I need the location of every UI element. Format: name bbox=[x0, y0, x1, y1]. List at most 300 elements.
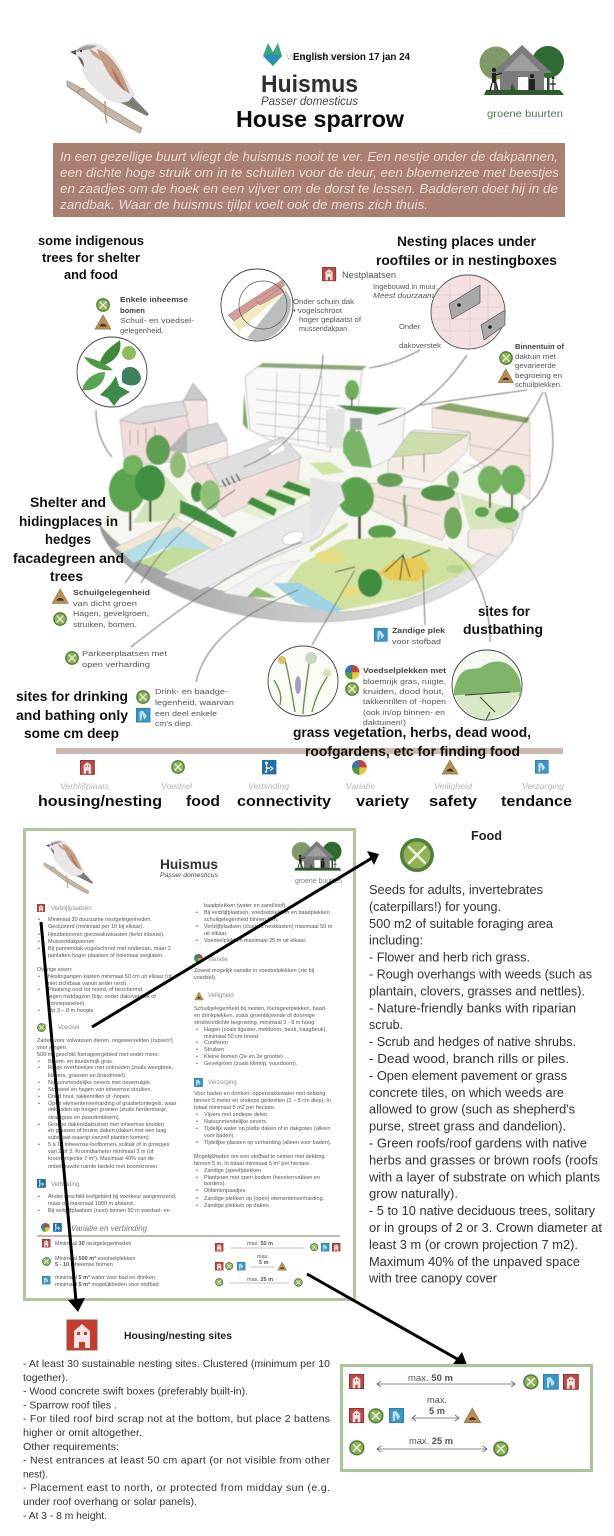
label: under sloped roof: hoger geplaatst of bbox=[299, 315, 362, 324]
section: Verzorging: borders). bbox=[204, 1181, 226, 1187]
label: under sloped roof bbox=[293, 297, 362, 333]
fact sheet bird bbox=[44, 840, 93, 894]
legend: Dutch labels: Veiligheid bbox=[434, 782, 473, 791]
callout: food places: daktuinen!) bbox=[363, 718, 407, 727]
text block: housing requirements: - Placement east to north, or protected from midday sun (e.g. bbox=[23, 1482, 330, 1494]
arrow: to food section bbox=[92, 851, 379, 1027]
section: Verbinding: maar op maximaal 1000 m afstand. bbox=[48, 1201, 135, 1207]
section: Veiligheid: Gevelgroen (zoals klimop, vuurdoorn). bbox=[204, 1061, 298, 1067]
callout: courtyard and roof garden bbox=[498, 342, 564, 389]
callout: dense green shelter bbox=[52, 588, 150, 629]
text block: housing requirements: - At least 30 sustainable nesting sites. Clustered (minimum per 10 bbox=[23, 1358, 330, 1370]
section: connection continued: Voedselplekken maximaal 25 m uit elkaar. bbox=[204, 938, 307, 944]
mini distance diagram: max. 50 m bbox=[247, 1241, 273, 1247]
text block: food requirements: - Flower and herb rich grass. bbox=[369, 950, 530, 965]
section: Verzorging: Tijdelijk water op platte daken of in dakgoten (alleen bbox=[204, 1126, 330, 1132]
section: connection continued: Verblijfplaatsen (clusters nestkasten) maximaal 50 m bbox=[204, 924, 333, 930]
section: Voedsel: Struweel en hagen van inheemse struiken. bbox=[48, 1087, 152, 1093]
section: Veiligheid: Kleine bomen (2e en 3e grootte) bbox=[204, 1054, 283, 1060]
legend: English labels: variety bbox=[356, 793, 410, 810]
callout: food places bbox=[345, 665, 447, 727]
mini distance diagram bbox=[215, 1241, 340, 1287]
section: Verblijfplaatsen: Op 3 – 8 m hoogte. bbox=[48, 1008, 96, 1014]
section: Variatie: Zoveel mogelijk variatie in voedselplekken (zie bij bbox=[194, 968, 314, 974]
callout: nesting places heading: Nesting places under bbox=[397, 233, 537, 249]
intro panel: zandbak. Waar de huismus tjilpt voelt ook de mens zich thuis. bbox=[59, 197, 428, 212]
section: Verblijfplaatsen: • bbox=[38, 1008, 40, 1014]
section: connection continued bbox=[196, 903, 333, 944]
section: Verblijfplaatsen: Houtbetonnen gierzwaluwkasten (liefst inbouw). bbox=[48, 932, 165, 938]
trees bbox=[109, 435, 525, 542]
section: Verblijfplaatsen: • bbox=[38, 987, 40, 993]
label: under eaves bbox=[399, 322, 441, 350]
fact sheet title bbox=[160, 856, 219, 879]
callout: drink and bath place: cm's diep. bbox=[155, 719, 193, 728]
callout: drink and bath place bbox=[136, 687, 234, 728]
text block: housing requirements: together). bbox=[23, 1372, 68, 1384]
legend: English labels bbox=[38, 793, 572, 810]
callout: food places: kruiden, dood hout, bbox=[363, 687, 444, 696]
callout: courtyard and roof garden: gevarieerde bbox=[515, 361, 556, 370]
text block: food requirements: - Scrub and hedges of native shrubs. bbox=[369, 1034, 576, 1049]
callout: courtyard and roof garden: daktuin met bbox=[515, 352, 557, 361]
icon: housing bbox=[67, 1320, 97, 1350]
callout: shelter heading bbox=[13, 494, 124, 584]
right stepped building bbox=[370, 403, 530, 540]
section: connection continued: • bbox=[196, 924, 198, 930]
callout: indigenous trees heading: trees for shelter bbox=[42, 250, 140, 265]
legend: English labels: housing/nesting bbox=[38, 793, 162, 810]
callout: drink and bath place: legenheid, waarvan bbox=[155, 698, 234, 707]
intro panel: en zaadjes om de hoek en een vijver om de dorst te lessen. Badderen doet hij in de bbox=[60, 181, 558, 196]
mini distance diagram: 5 m bbox=[259, 1260, 269, 1266]
mini distance diagram: max. bbox=[257, 1254, 269, 1260]
callout: sandy place: Zandige plek bbox=[392, 626, 446, 635]
detail circle: flowers bbox=[268, 646, 338, 716]
section: Verzorging: Zandige plekken op (open) elementenverharding. bbox=[204, 1196, 325, 1202]
section: Voedsel: Bloem- en kruidenrijk gras. bbox=[48, 1059, 114, 1065]
panel: distance diagram bbox=[342, 1366, 592, 1470]
label: under sloped roof: mussendakpan. bbox=[299, 324, 349, 333]
section: Verzorging: • bbox=[196, 1196, 198, 1202]
text block: food requirements: - 5 to 10 native deciduous trees, solitary bbox=[369, 1203, 595, 1218]
section: Veiligheid: Struiken bbox=[204, 1047, 224, 1053]
title: Huismus: Huismus bbox=[261, 71, 358, 98]
section: Veiligheid: minimaal 50 cm breed bbox=[204, 1034, 258, 1040]
section: Voedsel: Voedsel bbox=[58, 1025, 79, 1031]
section: Voedsel: 5 à 10 inheemse loofbomen, solitair of in groepjes bbox=[48, 1142, 170, 1148]
row: 5 m: max. bbox=[427, 1395, 447, 1406]
meadow colours and sand patch bbox=[315, 550, 464, 598]
callout: grass vegetation heading: grass vegetation, herbs, dead wood, bbox=[293, 724, 531, 740]
callout: drinking and bathing heading: sites for drinking bbox=[16, 688, 128, 704]
text block: housing requirements: Other requirements: bbox=[23, 1441, 119, 1453]
row: 50 m bbox=[349, 1373, 579, 1390]
street bbox=[163, 477, 348, 597]
text block: food requirements: least 3 m (or crown projection 7 m2). bbox=[369, 1237, 578, 1252]
text block: housing requirements: higher or omit altogether. bbox=[23, 1427, 142, 1439]
callout: drink and bath place: een deel enkele bbox=[155, 709, 217, 718]
section: Verbinding: Ander geschikt leefgebied bij voorkeur aangrenzend, bbox=[48, 1194, 177, 1200]
section: Variatie en verbinding summary: minimaal 5 m² water voor bad en drinken bbox=[55, 1274, 155, 1281]
heading: Housing/nesting sites: Housing/nesting sites bbox=[124, 1330, 232, 1342]
text block: food requirements: Seeds for adults, invertebrates bbox=[369, 882, 543, 897]
section: connection continued: Bij verblijfplaatsen, voedselplekken en baadplekken bbox=[204, 910, 330, 916]
section: Variatie en verbinding summary: Minimaal 500 m² voedselplekken bbox=[55, 1255, 135, 1262]
section: Verblijfplaatsen: Overige eisen: bbox=[37, 967, 73, 973]
text block: food requirements: scrub. bbox=[369, 1017, 403, 1032]
section: Verzorging: • bbox=[196, 1188, 198, 1194]
legend: English labels: tendance bbox=[501, 793, 572, 810]
label: under sloped roof: • vogelschroot bbox=[293, 306, 343, 315]
callout: dense green shelter: struiken, bomen. bbox=[73, 620, 137, 629]
callout: shelter heading: facadegreen and bbox=[13, 550, 124, 566]
section: Verbinding bbox=[37, 1179, 177, 1214]
section: Verblijfplaatsen: Verblijfplaatsen bbox=[51, 906, 92, 912]
text block: food requirements: Maximum 40% of the unpaved space bbox=[369, 1254, 580, 1269]
green lawns bbox=[133, 462, 518, 530]
section: Variatie bbox=[194, 954, 314, 981]
section: Voedsel: Dood hout, takkenrillen of -hopen. bbox=[48, 1094, 131, 1100]
text block: food requirements: with a layer of substrate on which plants bbox=[368, 1169, 600, 1184]
legend: Dutch labels: Verzorging bbox=[522, 782, 565, 791]
neighbourhood illustration bbox=[96, 350, 553, 682]
shed bbox=[468, 520, 513, 557]
label: indigenous trees: Schuil- en voedsel- bbox=[120, 316, 195, 325]
meadow bbox=[282, 537, 477, 610]
section: Variatie en verbinding summary bbox=[37, 1223, 340, 1288]
section: Veiligheid: Hagen (zoals liguster, meidoorn, beuk, haagbeuk), bbox=[204, 1027, 327, 1033]
fact sheet title: Passer domesticus bbox=[160, 872, 219, 879]
detail circle: sloped roof bbox=[221, 269, 293, 341]
callout: dense green shelter: Schuilgelegenheid bbox=[73, 588, 150, 597]
section: Verblijfplaatsen: Plaatsing oost tot noord, of beschermd bbox=[48, 987, 142, 993]
panel: Dutch fact sheet bbox=[24, 830, 354, 1300]
text block: food requirements: - Nature-friendly banks with riparian bbox=[369, 1000, 576, 1015]
text block: food requirements: - Green roofs/roof gardens with native bbox=[369, 1136, 587, 1150]
section: Voedsel: • bbox=[38, 1142, 40, 1148]
section: Verblijfplaatsen: Geclusterd (minimaal per 10 bij elkaar). bbox=[48, 924, 144, 930]
label: built into wall: Ingebouwd in muur, bbox=[373, 282, 438, 291]
row: 25 m bbox=[349, 1436, 508, 1456]
text block: food requirements: (caterpillars!) for young. bbox=[369, 899, 501, 914]
section: Veiligheid: • bbox=[196, 1054, 198, 1060]
legend: Dutch labels: Verbinding bbox=[248, 782, 290, 791]
text block: food requirements: plantain, clovers, grasses and nettles). bbox=[369, 983, 585, 998]
section: Verzorging: • bbox=[196, 1168, 198, 1174]
callout: sandy place bbox=[374, 626, 446, 646]
text block: food requirements: grow naturally). bbox=[369, 1186, 458, 1201]
section: Verblijfplaatsen: tegen middagzon (bijv. onder dakoverstek of bbox=[48, 994, 156, 1000]
title: House sparrow: House sparrow bbox=[236, 106, 404, 132]
label: indigenous trees: gelegenheid. bbox=[120, 326, 164, 335]
legend: English labels: safety bbox=[429, 793, 478, 810]
section: Voedsel: • bbox=[38, 1087, 40, 1093]
section: Variatie en verbinding summary: Variatie en verbinding bbox=[71, 1223, 147, 1233]
callout: drinking and bathing heading: and bathing only bbox=[16, 707, 128, 723]
section: Verzorging: Plantsoen met open bodem (heesterrvakken en bbox=[204, 1175, 320, 1181]
section: Verzorging: Zandige (speel)plekken. bbox=[204, 1168, 263, 1174]
row: 5 m: 5 m bbox=[429, 1406, 445, 1417]
callout: dustbathing heading: dustbathing bbox=[463, 621, 543, 637]
section: Variatie: Variatie bbox=[208, 957, 229, 963]
section: Variatie en verbinding summary: 5 - 10 inheemse bomen bbox=[55, 1262, 113, 1268]
section: connection continued: schuilgelegenheid binnen 5 m. bbox=[204, 917, 279, 923]
text block: food requirements: - Open element pavement or grass bbox=[369, 1068, 567, 1083]
callout: drink and bath place: Drink- en baadge- bbox=[155, 687, 229, 696]
section: Voedsel: Groene daken/daktuinen met inheemse kruiden bbox=[48, 1122, 164, 1128]
text block: housing requirements: - Sparrow roof tiles . bbox=[23, 1399, 117, 1411]
section: Veiligheid bbox=[194, 992, 327, 1067]
section: Verzorging: Tijdelijke plassen op verharding (alleen voor baden). bbox=[204, 1140, 332, 1146]
section: Verblijfplaatsen: niet zichtbaar vanuit ander nest). bbox=[48, 981, 128, 987]
callout: indigenous trees heading: and food bbox=[64, 267, 118, 282]
section: Verzorging: Zandige plekken op daken. bbox=[204, 1203, 271, 1209]
section: Verzorging: voor baden). bbox=[204, 1133, 235, 1139]
callout: drinking and bathing heading bbox=[16, 688, 128, 741]
section: Veiligheid: struiken/dichte begroeiing, minimaal 3 - 8 m hoog: bbox=[194, 1020, 316, 1026]
section: connection continued: • bbox=[196, 910, 198, 916]
row: 5 m bbox=[349, 1395, 481, 1423]
intro panel bbox=[53, 143, 565, 217]
section: Verblijfplaatsen: panlatten hoger plaatsen of helemaal weglaten. bbox=[48, 953, 164, 959]
section: Voedsel: substraat waarop vanzelf planten komen). bbox=[48, 1135, 151, 1141]
section: Variatie en verbinding summary: minimaal 5 m² mogelijkheden voor stofbad bbox=[55, 1281, 159, 1288]
section: Verzorging: Verzorging bbox=[208, 1080, 237, 1086]
text block: housing requirements: - Nest entrances at least 50 cm apart (or not visible from other bbox=[23, 1455, 330, 1467]
section: Voedsel: van 2 of 3. Kroondiameter minimaal 3 m (of bbox=[48, 1149, 154, 1155]
section: Verblijfplaatsen: Nestingangen kasten minimaal 50 cm uit elkaar (of bbox=[48, 974, 172, 980]
callout: shelter heading: Shelter and bbox=[30, 494, 106, 510]
section: Verzorging: totaal minimaal 5 m2 per hectare. bbox=[194, 1105, 276, 1111]
callout: shelter heading: trees bbox=[50, 568, 83, 584]
section: Voedsel: straatgras en paardenbloem). bbox=[48, 1115, 121, 1121]
fact sheet logo: groene buurten bbox=[295, 878, 342, 885]
text block: housing requirements: - At 3 - 8 m height. bbox=[23, 1510, 107, 1522]
section: connection continued: • bbox=[196, 938, 198, 944]
section: Verzorging bbox=[194, 1078, 332, 1209]
long low building bbox=[187, 437, 302, 517]
section: Voedsel: 500 m² geschikt foerageergebied met onder meer: bbox=[37, 1052, 160, 1058]
section: Verblijfplaatsen: Minimaal 30 duurzame nestgelegenheden. bbox=[48, 917, 152, 923]
version note: English version 17 jan 24 bbox=[293, 52, 410, 63]
section: Verblijfplaatsen: • bbox=[38, 939, 40, 945]
section: Verbinding: Verbinding bbox=[51, 1182, 79, 1188]
callout: indigenous trees heading bbox=[38, 233, 144, 282]
section: Verblijfplaatsen: • bbox=[38, 974, 40, 980]
text block: food requirements: - Dead wood, branch rills or piles. bbox=[369, 1051, 569, 1066]
fact sheet title: Huismus bbox=[160, 856, 218, 872]
legend divider bbox=[56, 748, 563, 754]
logo: groene buurten bbox=[480, 45, 564, 120]
label: built into wall bbox=[373, 282, 438, 300]
callout: grass vegetation heading: roofgardens, etc for finding food bbox=[305, 743, 520, 759]
callout: courtyard and roof garden: Binnentuin of bbox=[515, 342, 564, 351]
label: Nestplaatsen: Nestplaatsen bbox=[342, 270, 396, 280]
section: Variatie en verbinding summary: Minimaal 30 nestgelegenheden bbox=[55, 1241, 131, 1247]
terrace shrubs bbox=[368, 471, 462, 539]
section: Verzorging: • bbox=[196, 1140, 198, 1146]
section: Verblijfplaatsen: Bij pannendak vogelschroot met ondersan, maar 2 bbox=[48, 946, 171, 952]
section: Voedsel: • bbox=[38, 1101, 40, 1107]
callout: nesting places heading: rooftiles or in nestingboxes bbox=[376, 252, 557, 268]
fact sheet logo bbox=[292, 841, 342, 885]
text block: food requirements: with tree canopy cover bbox=[368, 1271, 498, 1286]
text block: food requirements: concrete tiles, on which weeds are bbox=[369, 1085, 564, 1100]
section: Voedsel: • bbox=[38, 1080, 40, 1086]
section: Veiligheid: • bbox=[196, 1061, 198, 1067]
callout: dense green shelter: van dicht groen bbox=[73, 599, 137, 608]
callout: dustbathing heading bbox=[463, 603, 543, 637]
label: under eaves: Onder bbox=[399, 322, 420, 331]
section: Voedsel: Natuurvriendelijke oevers met oeverruigte. bbox=[48, 1080, 152, 1086]
callout: courtyard and roof garden: schuilplekken. bbox=[515, 380, 562, 389]
section: Voedsel: • bbox=[38, 1059, 40, 1065]
text block: housing requirements: under roof overhang or solar panels). bbox=[23, 1496, 197, 1508]
label: indigenous trees bbox=[120, 295, 195, 335]
section: Voedsel: klavers, grassen en brandnetel) bbox=[48, 1073, 125, 1079]
legend: Dutch labels: Voedsel bbox=[161, 782, 192, 791]
section: Verblijfplaatsen: • bbox=[38, 946, 40, 952]
section: Veiligheid: Veiligheid bbox=[208, 993, 234, 999]
label: indigenous trees: bomen bbox=[120, 306, 145, 315]
callout: shelter heading: hedges bbox=[45, 531, 91, 547]
gabled house bbox=[168, 423, 228, 467]
section: Veiligheid: en drinkplekken, zoals groenblijvende of doornige bbox=[194, 1013, 315, 1019]
section: Verzorging: • bbox=[196, 1126, 198, 1132]
text block: housing requirements bbox=[23, 1358, 330, 1522]
section: Voedsel: • bbox=[38, 1122, 40, 1128]
section: Voedsel: • bbox=[38, 1094, 40, 1100]
section: Voedsel: onkruiden op mogen groeien (zoals herderstasje, bbox=[48, 1107, 168, 1113]
section: Verzorging: binnen 5 meter en ondiepe gedeelten (2 – 5 cm diep). In bbox=[194, 1098, 331, 1104]
callout: food places: takkenrillen of -hopen bbox=[363, 697, 446, 706]
arrow: to housing section bbox=[41, 922, 85, 1312]
section: Verzorging: • bbox=[196, 1112, 198, 1118]
callout: sandy place: voor stofbad bbox=[392, 637, 441, 646]
label: under eaves: dakoverstek bbox=[399, 341, 441, 350]
callout: parking bbox=[65, 649, 168, 669]
callout: shelter heading: hidingplaces in bbox=[19, 513, 118, 529]
callout: food places: (ook in/op binnen- en bbox=[363, 708, 445, 717]
callout: drinking and bathing heading: some cm deep bbox=[24, 725, 119, 741]
icon: nest sites bbox=[322, 267, 336, 281]
disc rim bbox=[99, 505, 524, 622]
section: Verblijfplaatsen: • bbox=[38, 932, 40, 938]
text block: food requirements: allowed to grow (such as shepherd's bbox=[369, 1102, 575, 1117]
section: Verzorging: binnen 5 m. In totaal minimaal 5 m² per hectare. bbox=[194, 1161, 311, 1167]
section: Verzorging: Mogelijkheden om een stofbad te nemen met dekking bbox=[194, 1154, 325, 1160]
section: Verbinding: • bbox=[38, 1194, 40, 1200]
text block: food requirements: or in groups of 2 or 3. Crown diameter at bbox=[369, 1220, 602, 1235]
green roof block bbox=[327, 380, 405, 468]
section: Verbinding: • bbox=[38, 1208, 40, 1214]
detail circle: leaves bbox=[77, 337, 147, 407]
tall apartment building bbox=[243, 363, 367, 452]
logo: groene buurten: groene buurten bbox=[487, 108, 563, 120]
section: connection continued: uit elkaar. bbox=[204, 931, 228, 937]
callout: indigenous trees heading: some indigenous bbox=[38, 233, 144, 248]
callout: food places: Voedselplekken met bbox=[363, 666, 447, 675]
callout: parking: Parkeerplaatsen met bbox=[82, 649, 168, 658]
callout: parking: open verharding bbox=[82, 660, 150, 669]
callout: dustbathing heading: sites for bbox=[478, 603, 531, 619]
section: Veiligheid: • bbox=[196, 1047, 198, 1053]
version note: Versie 2021 2020 bbox=[286, 52, 356, 62]
detail circle: brush pile bbox=[452, 650, 522, 720]
text block: food requirements: including: bbox=[369, 933, 423, 948]
arrow: to distance diagram bbox=[307, 1274, 467, 1365]
callout: dense green shelter: Hagen, gevelgroen, bbox=[73, 609, 149, 618]
text block: food requirements: - Rough overhangs with weeds (such as bbox=[369, 966, 592, 982]
section: connection continued: baadplekken (water en zand/stof). bbox=[204, 903, 287, 909]
section: Veiligheid: Schuilgelegenheid bij nesten, foerageerplekken, baad- bbox=[194, 1006, 327, 1012]
text block: food requirements: herbs and grasses or brown roofs (roofs bbox=[369, 1152, 598, 1167]
text block: housing requirements: - For tiled roof bird scrap not at the bottom, but place 2 battens bbox=[23, 1413, 330, 1425]
text block: housing requirements: - Wood concrete swift boxes (preferably built-in). bbox=[23, 1386, 248, 1398]
section: Verzorging: Natuurvriendelijke oevers. bbox=[204, 1119, 268, 1125]
callout: grass vegetation heading bbox=[293, 724, 531, 759]
subtitle: Latin name: Passer domesticus bbox=[261, 94, 358, 108]
label: under sloped roof: Onder schuin dak bbox=[293, 297, 354, 306]
section: Voedsel: Open elementenverharding of grasbetontegels, waar bbox=[48, 1101, 177, 1107]
intro panel: een dichte hoge struik om in te schuilen voor de deur, een bloemenzee met beestjes bbox=[60, 165, 560, 180]
row: 50 m: max. 50 m bbox=[408, 1373, 453, 1384]
legend: Dutch labels: Variatie bbox=[346, 782, 376, 791]
section: Voedsel: voor jongen. bbox=[37, 1045, 68, 1051]
text block: food requirements: purse, street grass and dandelion). bbox=[369, 1119, 566, 1134]
section: Verzorging: • bbox=[196, 1175, 198, 1181]
text block: food requirements: 500 m2 of suitable foraging area bbox=[369, 916, 554, 931]
callout: food places: bloemrijk gras, ruigte, bbox=[363, 677, 446, 686]
section: Verzorging: Voor baden en drinken: oppervlaktewater met dekking bbox=[194, 1091, 325, 1097]
section: Verzorging: • bbox=[196, 1119, 198, 1125]
disc ground bbox=[100, 440, 520, 612]
section: Veiligheid: Coniferen bbox=[204, 1040, 228, 1046]
water edge pond bbox=[273, 583, 343, 613]
pointer lines bbox=[96, 350, 553, 682]
section: Voedsel bbox=[37, 1023, 177, 1170]
header: partner logo bbox=[263, 43, 282, 66]
section: Verbinding: Bij verblijfplaatsen (nest) binnen 50 m voedsel- en bbox=[48, 1208, 170, 1214]
section: Voedsel: onbebouwde ruimte bedekt met boomkronen. bbox=[48, 1164, 159, 1170]
legend: English labels: food bbox=[186, 793, 220, 810]
legend: Dutch labels: Verblijfplaats bbox=[60, 782, 109, 791]
header: bird illustration bbox=[67, 44, 149, 133]
legend: English labels: connectivity bbox=[237, 793, 332, 810]
callout: courtyard and roof garden: begroeing en bbox=[515, 371, 562, 380]
label: indigenous trees: Enkele inheemse bbox=[120, 295, 188, 304]
label: built into wall: Meest duurzaam bbox=[373, 291, 434, 300]
castle bbox=[120, 383, 208, 466]
section: Voedsel: kroonprojectie 7 m²). Maximaal 40% van de bbox=[48, 1156, 154, 1162]
section: Veiligheid: • bbox=[196, 1040, 198, 1046]
heading: Food: Food bbox=[471, 829, 502, 843]
section: Variatie: voedsel). bbox=[194, 975, 217, 981]
legend: Dutch labels bbox=[60, 782, 565, 791]
row: 25 m: max. 25 m bbox=[409, 1436, 453, 1447]
text block: food requirements bbox=[368, 882, 602, 1286]
legend: icons bbox=[80, 760, 549, 775]
section: Voedsel: Zaden voor volwassen dieren, ongewervelden (rupsen!) bbox=[37, 1038, 173, 1044]
section: Verblijfplaatsen: • bbox=[38, 917, 40, 923]
section: Verzorging: Olifantenpaadjes. bbox=[204, 1188, 247, 1194]
section: Verzorging: • bbox=[196, 1203, 198, 1209]
grass by pond bbox=[247, 587, 277, 598]
mini distance diagram: max. 25 m bbox=[247, 1277, 273, 1283]
section: Veiligheid: • bbox=[196, 1027, 198, 1033]
section: Voedsel: Ruige overhoekjes met onkruiden (zoals weegbree, bbox=[48, 1065, 174, 1071]
